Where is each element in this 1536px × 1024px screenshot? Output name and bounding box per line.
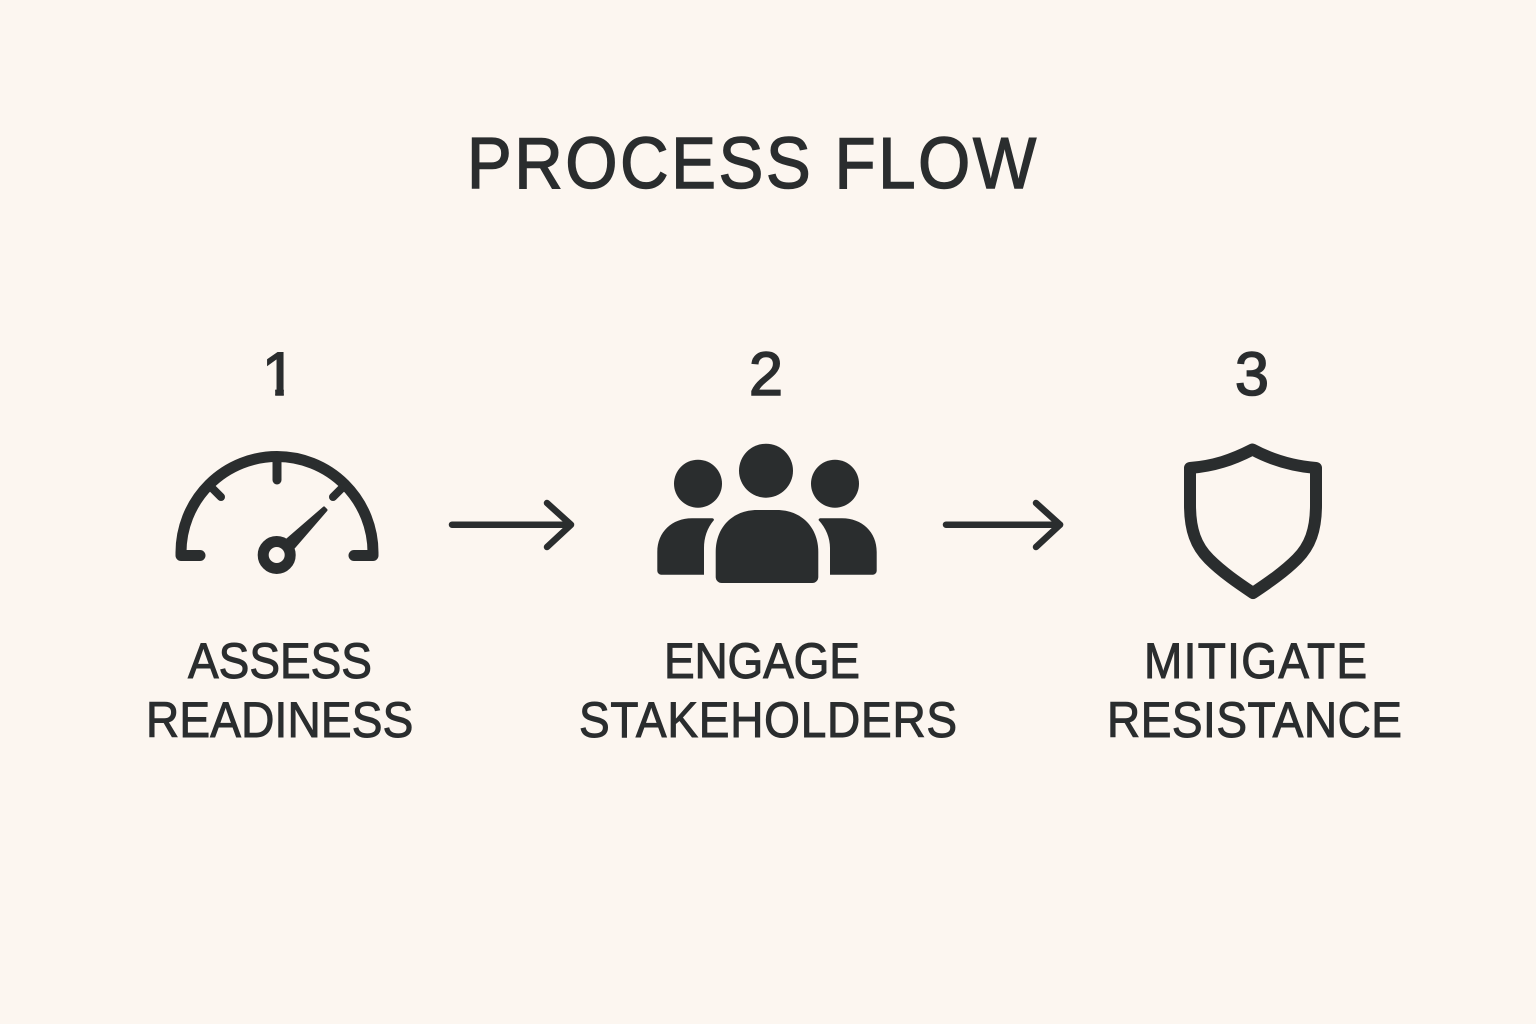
step 1 number: 1 xyxy=(262,340,296,408)
icon: gauge xyxy=(181,456,373,568)
step 1 label: ASSESS xyxy=(188,634,372,689)
step 3 label xyxy=(1107,634,1402,748)
arrow: step 2 to step 3 xyxy=(946,503,1060,547)
step 2 label xyxy=(579,634,957,748)
step 3 label: RESISTANCE xyxy=(1107,693,1402,748)
icon: shield xyxy=(1190,450,1316,593)
step 3 number: 3 xyxy=(1235,340,1269,408)
step 1 label: READINESS xyxy=(146,693,413,748)
arrow: step 1 to step 2 xyxy=(452,503,571,547)
icon: people xyxy=(657,444,877,583)
step 2 label: ENGAGE xyxy=(664,634,860,689)
title: PROCESS FLOW xyxy=(467,123,1037,204)
step 3 label: MITIGATE xyxy=(1144,634,1367,689)
step 1 label xyxy=(146,634,413,748)
step 2 label: STAKEHOLDERS xyxy=(579,693,957,748)
step 2 number: 2 xyxy=(749,340,783,408)
